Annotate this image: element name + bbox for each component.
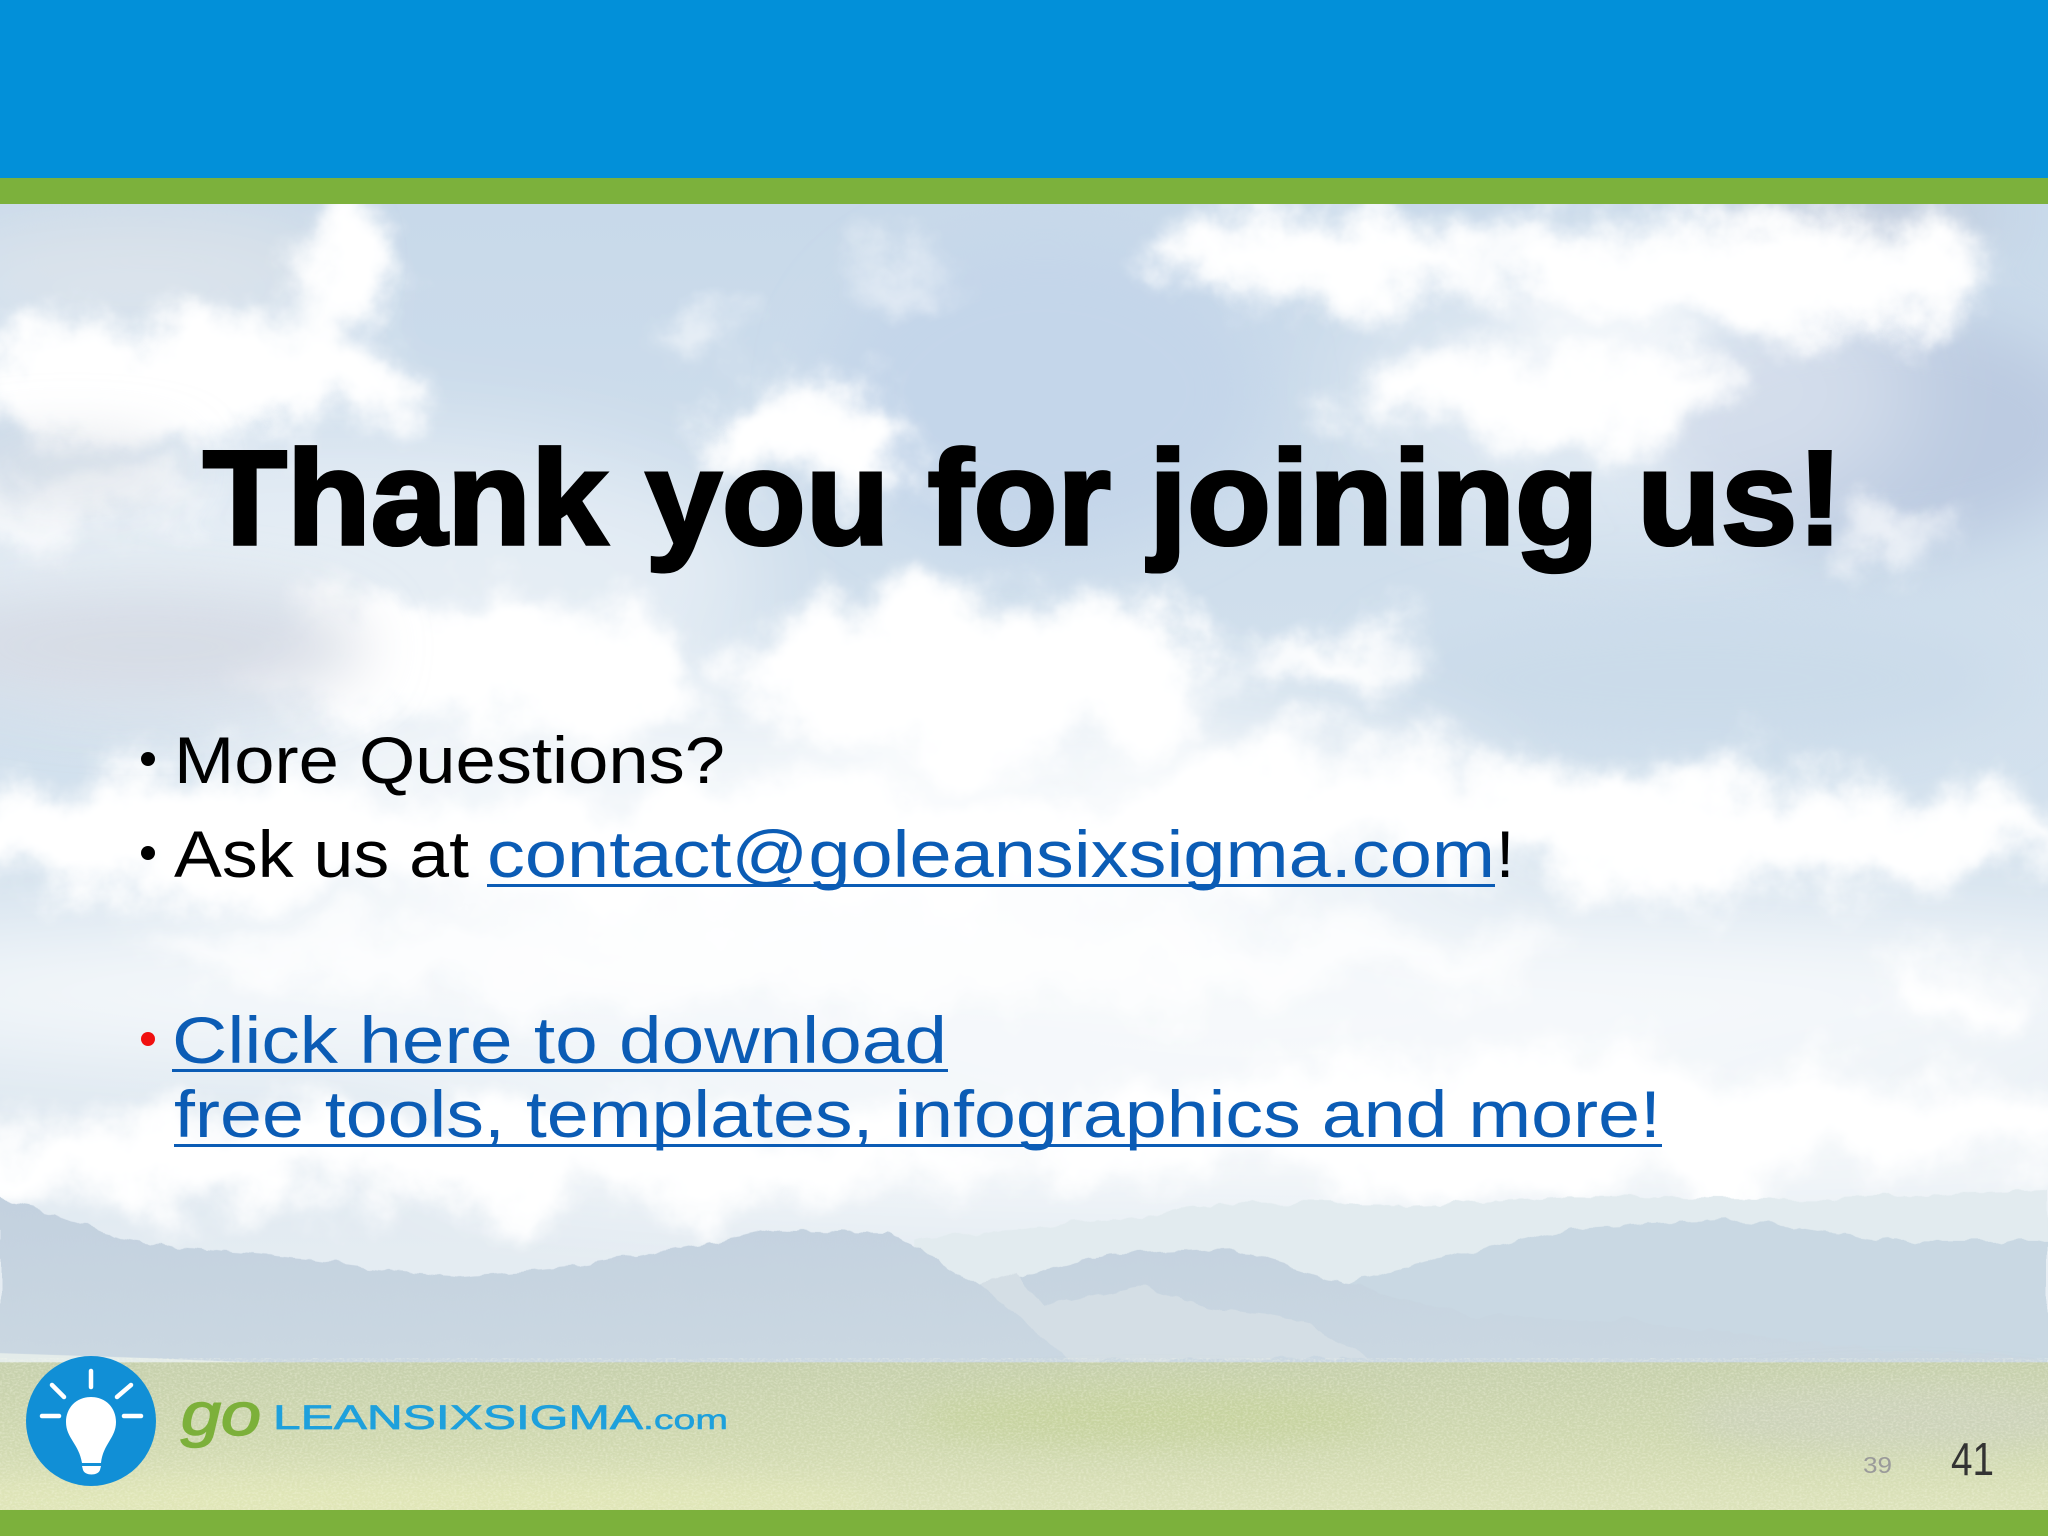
mountains [0, 1190, 2048, 1371]
grass field [0, 1362, 2048, 1511]
page number: 41: 41 [1951, 1433, 1994, 1485]
bullet: download link: free tools, templates, infographics and more! [174, 1077, 1661, 1151]
page number: 39: 39 [1863, 1452, 1892, 1478]
bullet: contact email: ! [1496, 817, 1514, 891]
bullet: download link [141, 1003, 1662, 1151]
top blue band [0, 0, 2048, 178]
bullet list [141, 723, 1662, 1151]
bullet: download link: Click here to download [172, 1003, 947, 1077]
icon: light bulb logo [26, 1356, 156, 1486]
bottom green stripe [0, 1510, 2048, 1536]
bullet: contact email [141, 817, 1514, 891]
bullet: contact email: contact@goleansixsigma.com [487, 817, 1495, 891]
logo wordmark [181, 1381, 728, 1448]
logo wordmark: LEANSIXSIGMA [273, 1399, 643, 1437]
logo wordmark: .com [643, 1404, 728, 1435]
title: Thank you for joining us! [203, 424, 1843, 573]
bullet: more questions: More Questions? [174, 723, 725, 797]
soft haze [0, 222, 2048, 1215]
logo wordmark: go [181, 1381, 261, 1448]
top green stripe [0, 178, 2048, 204]
bullet: contact email: Ask us at [174, 817, 469, 891]
